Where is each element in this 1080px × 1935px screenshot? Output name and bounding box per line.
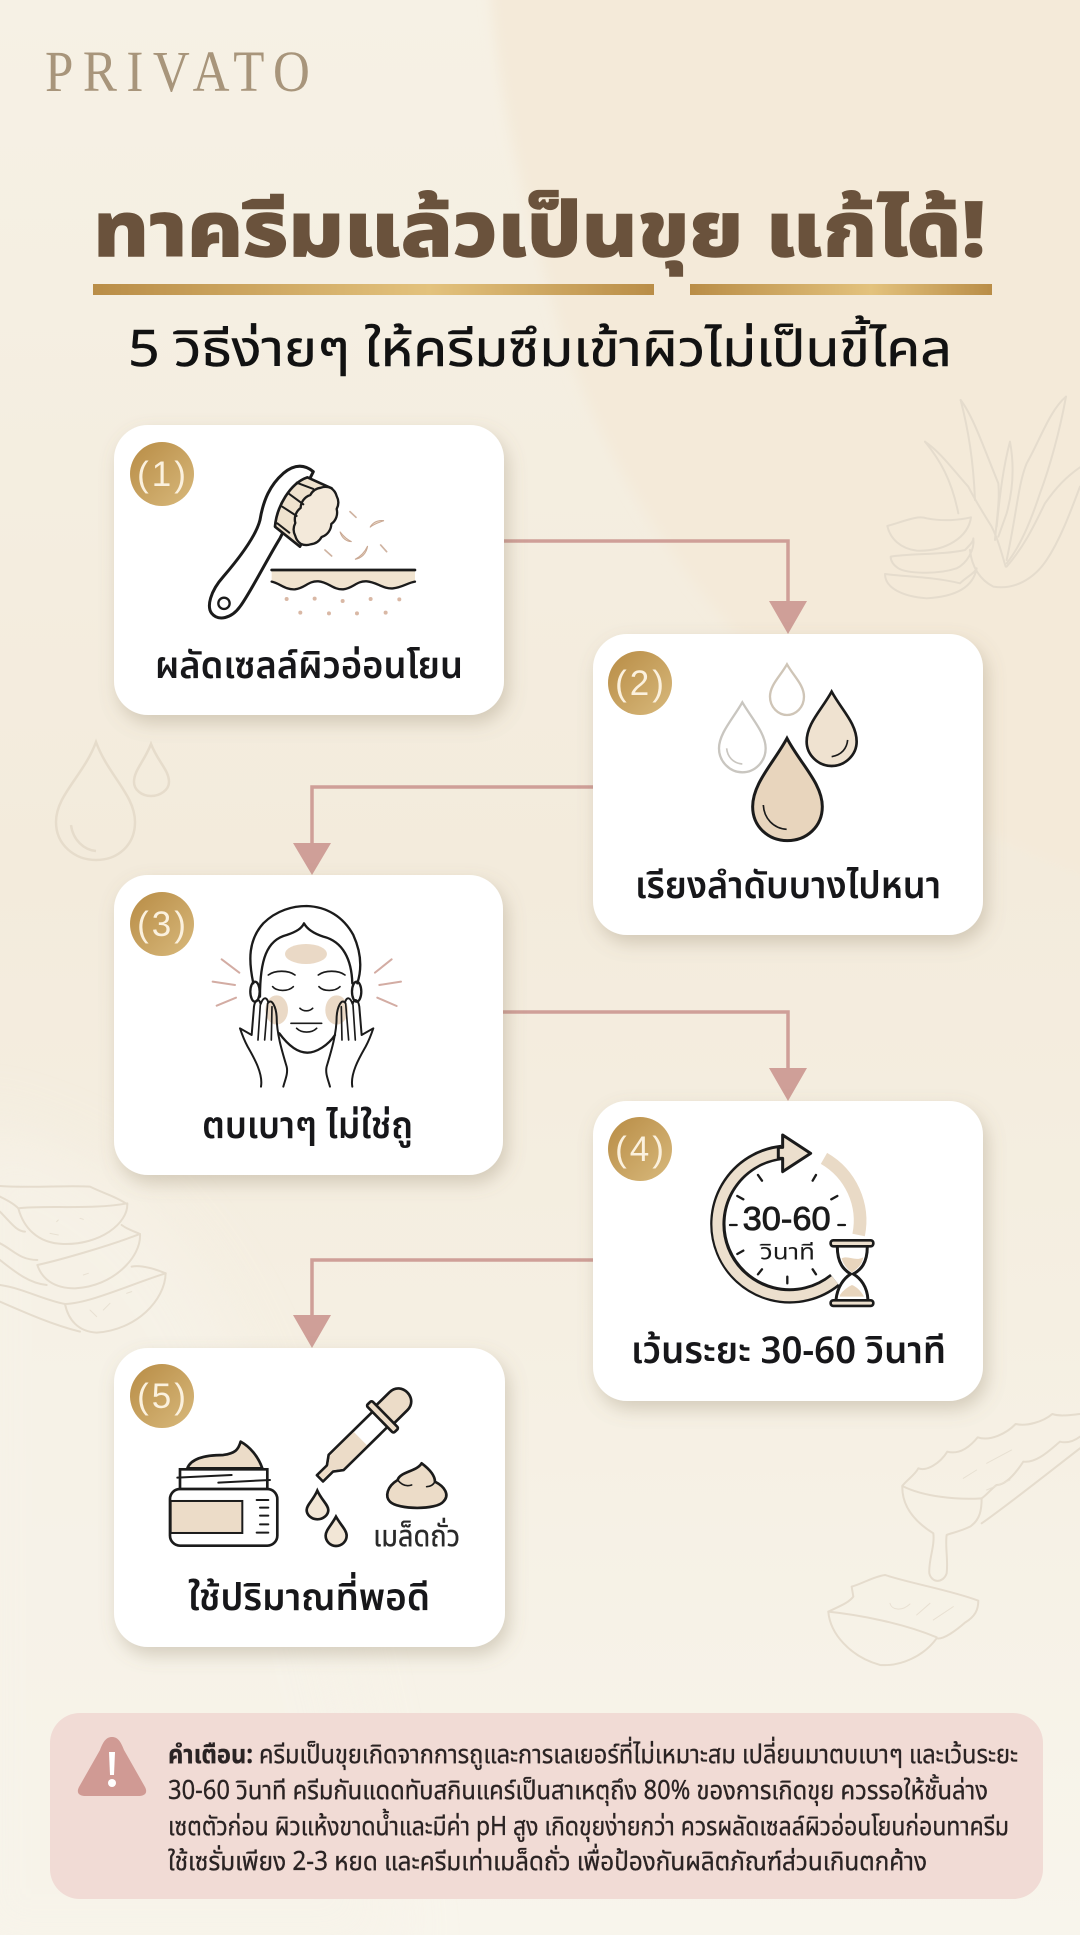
icon: timer and hourglass: วินาที — [759, 1236, 815, 1269]
title underline — [93, 284, 992, 295]
badge 3 — [130, 892, 194, 956]
title: ทาครีมแล้วเป็นขุย แก้ได้! — [93, 176, 986, 291]
label: step 3: ตบเบาๆ ไม่ใช่ถู — [202, 1099, 413, 1155]
label: step 4: เว้นระยะ 30-60 วินาที — [631, 1324, 946, 1380]
label: step 1: ผลัดเซลล์ผิวอ่อนโยน — [155, 639, 463, 695]
warning text: ใช้เซรั่มเพียง 2-3 หยด และครีมเท่าเมล็ดถั่ว เพื่อป้องกันผลิตภัณฑ์ส่วนเกินตกค้าง — [168, 1842, 927, 1882]
decoration: aloe leaf bottom right — [828, 1414, 1080, 1665]
label: step 5: ใช้ปริมาณที่พอดี — [188, 1571, 430, 1627]
arrow: step 1 to step 2 — [504, 541, 807, 634]
callout: warning — [50, 1713, 1043, 1899]
icon: timer and hourglass: 30-60 — [743, 1201, 831, 1238]
badge 4 — [608, 1117, 672, 1181]
badge 2: (2) — [615, 664, 667, 703]
arrow: step 4 to step 5 — [293, 1260, 593, 1348]
icon: droplets — [719, 664, 857, 841]
panel: step 1 exfoliate — [114, 425, 504, 715]
decoration: aloe plant top right — [885, 397, 1080, 598]
badge 3: (3) — [137, 905, 189, 944]
warning text: คำเตือน: — [168, 1735, 253, 1775]
subtitle: 5 วิธีง่ายๆ ให้ครีมซึมเข้าผิวไม่เป็นขี้ไคล — [128, 313, 952, 389]
arrow: step 3 to step 4 — [503, 1012, 807, 1101]
warning text: ครีมเป็นขุยเกิดจากการถูและการเลเยอร์ที่ไม่เหมาะสม เปลี่ยนมาตบเบาๆ และเว้นระยะ — [259, 1735, 1018, 1775]
icon: face with hands — [213, 906, 401, 1087]
decoration: outline droplets left — [56, 742, 169, 860]
decoration: aloe slices left — [0, 1186, 166, 1333]
panel: step 3 pat gently — [114, 875, 503, 1175]
warning text: 30-60 วินาที ครีมกันแดดทับสกินแคร์เป็นสาเหตุถึง 80% ของการเกิดขุย ควรรอให้ชั้นล่าง — [168, 1771, 988, 1811]
badge 2 — [608, 651, 672, 715]
panel: step 4 wait — [593, 1101, 983, 1401]
badge 5 — [130, 1364, 194, 1428]
icon: cream jar, dropper and dollop: เมล็ดถั่ว — [373, 1516, 460, 1560]
arrow: step 2 to step 3 — [293, 787, 593, 875]
icon: warning triangle — [78, 1737, 146, 1796]
panel: step 5 right amount — [114, 1348, 505, 1647]
badge 4: (4) — [615, 1130, 667, 1169]
badge 1 — [130, 442, 194, 506]
brand logo: PRIVATO — [45, 39, 310, 104]
icon: cream jar, dropper and dollop — [170, 1379, 460, 1560]
panel: step 2 thin to thick — [593, 634, 983, 935]
badge 1: (1) — [137, 455, 189, 494]
warning text — [168, 1735, 1018, 1882]
badge 5: (5) — [137, 1377, 189, 1416]
icon: timer and hourglass — [717, 1135, 873, 1306]
icon: brush and skin — [209, 466, 415, 618]
label: step 2: เรียงลำดับบางไปหนา — [635, 859, 941, 915]
